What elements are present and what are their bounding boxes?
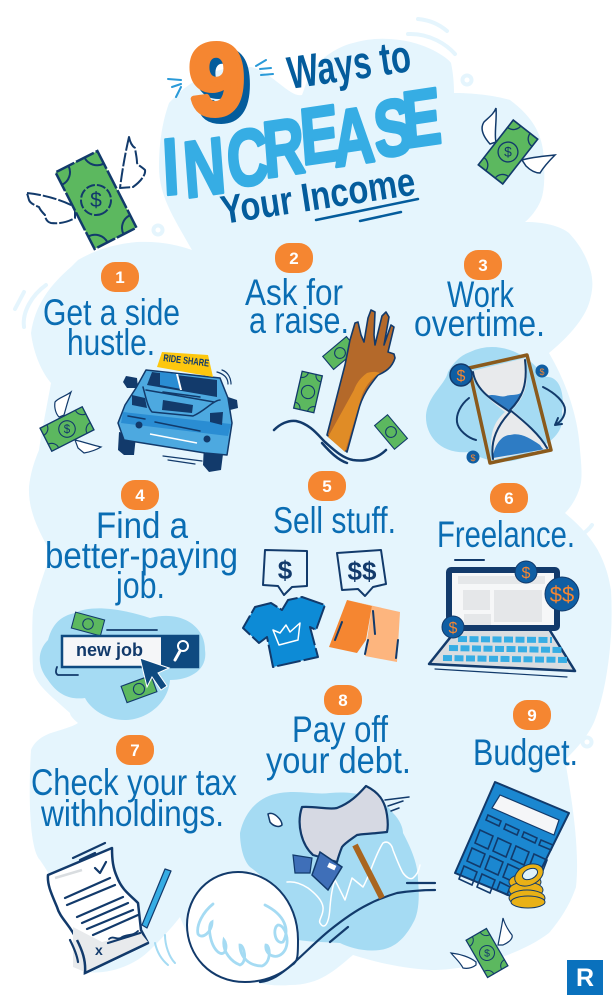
icon: car with ride share sign <box>118 352 238 472</box>
logo: R <box>576 964 594 992</box>
step 1 <box>43 262 238 472</box>
text: Check your tax withholdings <box>31 762 237 834</box>
logo <box>567 960 603 995</box>
icon: speech bubble two dollar signs: $$ <box>348 556 377 586</box>
badge 5: 5 <box>322 477 332 496</box>
text: Get a side hustle: hustle. <box>67 322 155 363</box>
step 4 <box>45 480 238 703</box>
flying money top left <box>27 137 145 249</box>
badge 3 <box>464 250 502 280</box>
badge 2: 2 <box>289 249 299 268</box>
text: Ask for a raise <box>245 272 349 341</box>
icon: car with ride share sign: RIDE SHARE <box>163 353 210 370</box>
icon: speech bubble one dollar sign: $ <box>278 555 293 585</box>
text: Work overtime <box>414 274 545 344</box>
text: Get a side hustle: Get a side <box>43 292 180 333</box>
icon: calculator and coins <box>455 782 569 908</box>
step 7 <box>31 735 237 973</box>
flying money top left: $ <box>90 189 102 212</box>
badge 2 <box>275 243 313 273</box>
flying money bottom <box>451 918 512 977</box>
text: Get a side hustle <box>43 292 180 363</box>
icon: laptop with coins: $ <box>449 620 458 637</box>
text: Find a better-paying job <box>45 505 238 606</box>
step 8 <box>187 685 435 982</box>
icon: hourglass: $ <box>539 367 545 377</box>
text: Pay off your debt: your debt. <box>266 740 411 781</box>
text: Freelance: Freelance. <box>437 514 575 555</box>
icon: speech bubble two dollar signs <box>337 550 386 596</box>
heading: INCREASE: INCREASE <box>161 71 444 215</box>
badge 8 <box>324 685 362 715</box>
flying money step 1 <box>40 392 101 453</box>
step 5 <box>243 471 400 667</box>
decorative arcs and rings <box>15 19 598 767</box>
illustration backdrop blobs <box>40 347 563 951</box>
badge 7 <box>116 735 154 765</box>
icon: laptop with coins <box>429 560 579 677</box>
step 6 <box>429 483 579 677</box>
badge 6 <box>490 483 528 513</box>
badge 4: 4 <box>135 486 145 505</box>
flying money top right <box>478 108 555 184</box>
text: Ask for a raise: a raise. <box>249 300 349 341</box>
big number 9: 9 <box>189 24 245 136</box>
badge 1 <box>101 262 139 292</box>
badge 9 <box>513 700 551 730</box>
title <box>161 24 444 233</box>
heading: Your Income: Your Income <box>218 160 418 233</box>
text: Pay off your debt <box>266 709 411 781</box>
step 3 <box>414 250 565 464</box>
icon: hourglass: $ <box>470 453 476 463</box>
icon: search bar with cursor: new job <box>76 640 143 660</box>
text: Find a better-paying job: job. <box>115 565 165 606</box>
text: Ask for a raise: Ask for <box>245 272 343 313</box>
title underline <box>316 199 418 221</box>
text: Find a better-paying job: Find a <box>96 505 188 546</box>
big number 9: 9 <box>195 30 251 142</box>
text: Check your tax withholdings: withholdings. <box>40 793 224 834</box>
flying money top right: $ <box>504 144 512 160</box>
icon: signed document and pen: x <box>95 942 103 958</box>
badge 3: 3 <box>478 256 488 275</box>
heading: Ways to: Ways to <box>284 29 414 99</box>
text: Budget: Budget. <box>473 732 578 773</box>
icon: snowball <box>187 872 298 982</box>
icon: signed document and pen <box>48 843 175 973</box>
text: Find a better-paying job: better-paying <box>45 535 238 576</box>
burst marks around 9 <box>168 60 273 97</box>
badge 7: 7 <box>130 741 140 760</box>
icon: axe chopping credit cards <box>268 786 420 926</box>
step 9 <box>455 700 578 908</box>
badge 8: 8 <box>338 691 348 710</box>
icon: hourglass <box>450 355 565 464</box>
flying money bottom: $ <box>484 948 490 960</box>
text: Pay off your debt: Pay off <box>292 709 389 750</box>
icon: search bar with cursor <box>56 612 198 703</box>
badge 1: 1 <box>115 268 125 287</box>
step 2 <box>31 243 603 995</box>
badge 9: 9 <box>527 706 537 725</box>
text: Check your tax withholdings: Check your tax <box>31 762 237 803</box>
icon: raised hand <box>274 310 395 463</box>
icon: hourglass: $ <box>457 368 466 385</box>
badge 4 <box>121 480 159 510</box>
text: Work overtime: overtime. <box>414 303 545 344</box>
icon: speech bubble one dollar sign <box>263 550 307 595</box>
money beside hand <box>294 337 407 449</box>
text: Sell stuff: Sell stuff. <box>273 500 396 541</box>
icon: blue t-shirt <box>243 597 325 667</box>
icon: laptop with coins: $$ <box>550 582 574 607</box>
badge 5 <box>308 471 346 501</box>
hill curve <box>260 883 435 982</box>
flying money step 1: $ <box>64 424 71 436</box>
icon: laptop with coins: $ <box>522 565 531 582</box>
text: Work overtime: Work <box>447 274 514 315</box>
icon: orange shorts <box>329 600 400 662</box>
badge 6: 6 <box>504 489 514 508</box>
